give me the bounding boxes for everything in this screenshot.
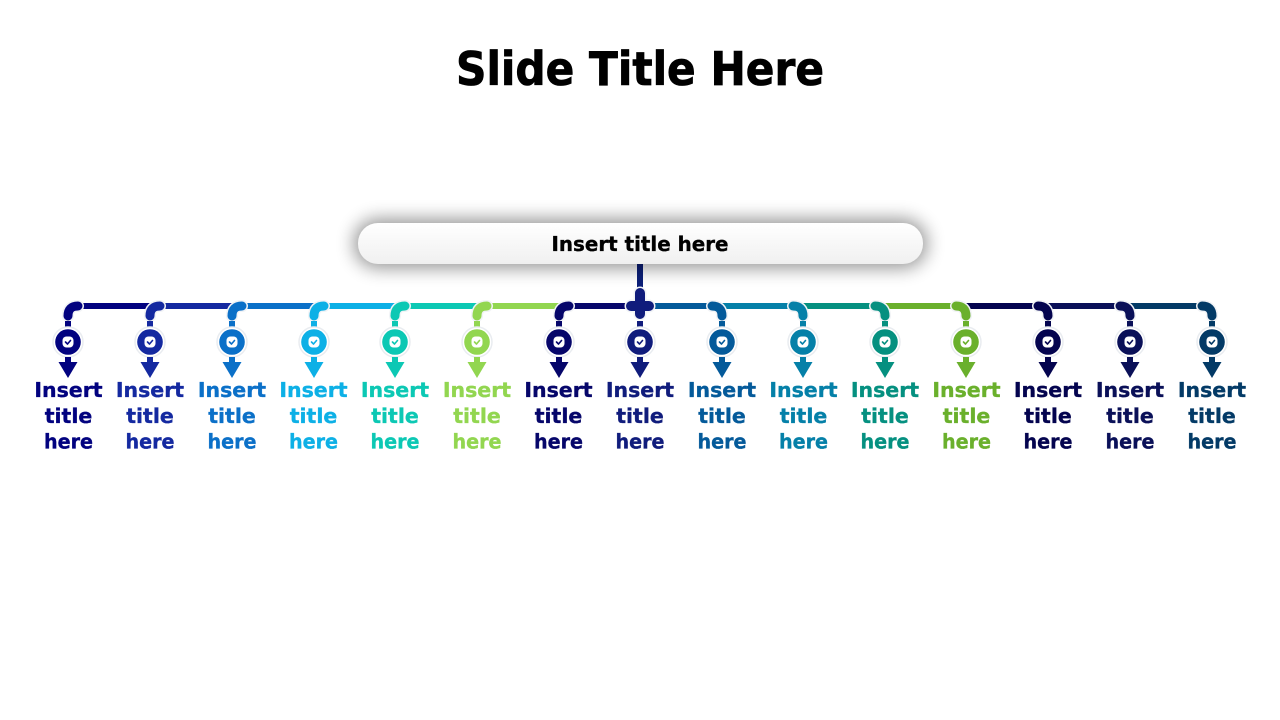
item 7: here — [534, 430, 583, 454]
item 8: centre junction — [606, 293, 674, 454]
item 11: Insert — [851, 378, 919, 402]
item 15 — [1178, 306, 1246, 454]
item 12 — [932, 306, 1001, 454]
item 8: centre junction: title — [616, 404, 664, 428]
item 3 — [198, 306, 266, 454]
item 5 — [361, 306, 429, 454]
item 10: title — [780, 404, 827, 428]
item 1: title — [45, 404, 92, 428]
item 13: title — [1024, 404, 1072, 428]
item 15: Insert — [1178, 378, 1246, 402]
item 11 — [851, 306, 919, 454]
item 4: title — [290, 404, 337, 428]
item 9: title — [698, 404, 746, 428]
item 4: here — [289, 430, 338, 454]
panel: main title box — [354, 219, 927, 268]
item 6: title — [453, 404, 501, 428]
item 10: Insert — [769, 378, 838, 402]
item 6: Insert — [443, 378, 511, 402]
item 15: title — [1188, 404, 1236, 428]
item 9: here — [698, 430, 746, 454]
item 3: title — [208, 404, 256, 428]
item 12: here — [942, 430, 991, 454]
item 9: Insert — [688, 378, 756, 402]
item 11: here — [860, 430, 910, 454]
panel: main title box: Insert title here — [552, 232, 728, 256]
item 2: title — [126, 404, 174, 428]
item 13: Insert — [1014, 378, 1082, 402]
item 10 — [769, 306, 838, 454]
item 2: Insert — [116, 378, 184, 402]
item 5: title — [371, 404, 419, 428]
item 4 — [279, 306, 348, 454]
item 9 — [688, 306, 756, 454]
item 8: centre junction: Insert — [606, 378, 674, 402]
item 11: title — [861, 404, 909, 428]
item 2: here — [126, 430, 174, 454]
item 5: Insert — [361, 378, 429, 402]
item 7: title — [535, 404, 582, 428]
item 4: Insert — [279, 378, 348, 402]
item 6: here — [452, 430, 502, 454]
item 14: here — [1106, 430, 1154, 454]
item 13 — [1014, 306, 1082, 454]
item 5: here — [370, 430, 420, 454]
connector: horizontal bus line — [78, 303, 1202, 309]
item 8: centre junction: here — [616, 430, 664, 454]
item 14 — [1096, 306, 1164, 454]
item 1: here — [44, 430, 93, 454]
item 14: title — [1106, 404, 1154, 428]
connector: central stem — [637, 262, 643, 298]
item 1 — [34, 306, 103, 454]
item 1: Insert — [34, 378, 103, 402]
item 2 — [116, 306, 184, 454]
item 12: title — [943, 404, 990, 428]
item 14: Insert — [1096, 378, 1164, 402]
item 13: here — [1024, 430, 1072, 454]
item 15: here — [1188, 430, 1236, 454]
item 6 — [443, 306, 511, 454]
item 3: here — [208, 430, 256, 454]
item 7 — [524, 306, 593, 454]
item 3: Insert — [198, 378, 266, 402]
title: Slide Title Here — [456, 42, 824, 96]
item 10: here — [779, 430, 828, 454]
item 12: Insert — [932, 378, 1001, 402]
item 7: Insert — [524, 378, 593, 402]
